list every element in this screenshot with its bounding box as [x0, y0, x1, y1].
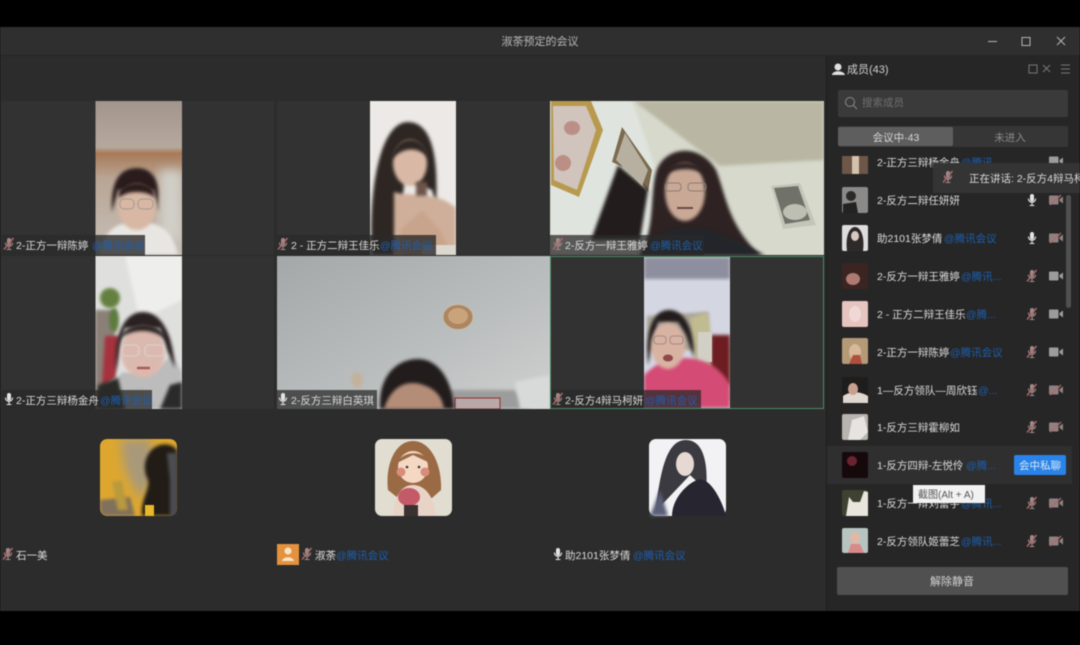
members header: [832, 63, 1070, 76]
search box: 搜索成员: [862, 96, 904, 109]
member row (hovered): [827, 446, 1072, 484]
member row: [842, 187, 1063, 213]
name label: @腾讯会议: [336, 549, 389, 562]
member row: 2 - 正方二辩王佳乐: [877, 308, 966, 321]
avatar tile: 淑荼: [277, 439, 452, 565]
search box: [838, 90, 1068, 117]
name label: 2 - 正方二辩王佳乐: [291, 239, 380, 252]
name label: 2-反方三辩白英琪: [291, 394, 374, 407]
avatar: anime girl: [649, 439, 726, 516]
name label: @腾讯会议: [633, 549, 686, 562]
screenshot tooltip: 截图(Alt + A): [918, 488, 974, 501]
window controls: [988, 37, 1065, 46]
member row: [842, 225, 1063, 251]
member row: @腾讯...: [961, 270, 1001, 283]
member row: @腾讯会议: [944, 232, 997, 245]
member row: 1—反方领队—周欣钰: [877, 384, 978, 397]
name label: [302, 548, 389, 562]
panel: members sidebar: [826, 56, 1080, 611]
member row: @...: [978, 385, 997, 397]
scrollbar: [1066, 195, 1071, 308]
tabs: 会议中·43: [873, 131, 919, 144]
name label: [550, 235, 704, 255]
member row (hovered): @腾...: [966, 459, 996, 472]
screenshot tooltip: [913, 485, 985, 503]
video tile: 正方二辩王佳乐: [277, 101, 456, 255]
member row: 助2101张梦倩: [877, 232, 943, 245]
member row: @腾讯: [961, 156, 993, 169]
member row: 2-反方二辩任妍妍: [877, 194, 960, 207]
member row: 2-反方领队姬蕾芝: [877, 535, 960, 548]
name label: [277, 235, 436, 255]
avatar tile: 助2101张梦倩: [554, 439, 726, 562]
private chat button: [1014, 455, 1066, 475]
name label: @腾讯会议: [92, 239, 145, 252]
name label: @腾讯会议: [380, 239, 433, 252]
window title: 淑荼预定的会议: [502, 34, 578, 48]
member row: [842, 263, 1063, 289]
member row: 1-反方三辩霍柳如: [877, 421, 960, 434]
member row: 2-正方三辩杨金舟: [877, 156, 960, 169]
member row: 2-正方一辩陈婷: [877, 346, 950, 359]
name label: 2-反方一辩王雅婷: [565, 239, 648, 252]
member row: [842, 528, 1063, 553]
member row (hovered): 1-反方四辩-左悦伶: [877, 459, 963, 472]
name label: @腾讯会议: [650, 239, 703, 252]
tabs: 未进入: [994, 132, 1026, 144]
video tile: 反方三辩白英琪: [277, 256, 550, 409]
video tile: 正方一辩陈婷: [2, 101, 182, 255]
black letterbox bottom: [0, 611, 1080, 645]
member row: [842, 377, 1063, 403]
member row: 2-反方一辩王雅婷: [877, 270, 960, 283]
active speaker border: [550, 256, 824, 408]
unmute button: 解除静音: [930, 574, 974, 588]
members header: 成员(43): [847, 63, 889, 76]
name label: [277, 390, 377, 409]
name label: [551, 390, 701, 408]
member row: [842, 414, 1063, 440]
private chat button: 会中私聊: [1019, 459, 1061, 472]
member row: @腾讯会议: [950, 346, 1003, 359]
title bar: [0, 27, 1080, 56]
video tile: 正方三辩杨金舟: [2, 256, 182, 409]
tabs: [838, 126, 1068, 147]
member row: 1-反方一辩刘蕾宇: [877, 497, 960, 510]
member row: [842, 490, 1063, 516]
member row: @腾讯...: [961, 497, 1001, 510]
name label: 助2101张梦倩: [565, 549, 631, 562]
member row: [842, 338, 1063, 364]
member row: [842, 301, 1063, 327]
name label: 2-正方三辩杨金舟: [16, 394, 99, 407]
avatar: yellow silhouette: [100, 439, 177, 516]
name label: 2-正方一辩陈婷: [16, 239, 89, 252]
black letterbox top: [0, 0, 1080, 27]
member row: [842, 156, 1063, 174]
name label: @腾讯会议: [645, 394, 698, 407]
name label: [2, 235, 145, 255]
name label: [554, 548, 686, 562]
video grid cell backgrounds: [1, 101, 824, 409]
member row: @腾...: [966, 308, 996, 321]
name label: [3, 548, 48, 562]
name label: 石一美: [16, 549, 48, 562]
avatar tile: 石一美: [3, 439, 177, 562]
speaking tooltip: [933, 163, 1080, 193]
member row: @腾讯...: [961, 535, 1001, 548]
video tile: 反方4辩马柯妍 (active speaker): [550, 256, 824, 408]
unmute button: [837, 567, 1068, 595]
name label: [2, 390, 153, 409]
name label: 2-反方4辩马柯妍: [565, 394, 644, 407]
name label: 淑荼: [315, 549, 336, 562]
video tile: 反方一辩王雅婷: [550, 101, 824, 255]
host badge: [277, 544, 299, 565]
avatar: cartoon girl: [375, 439, 452, 516]
name label: @腾讯会议: [100, 394, 153, 407]
